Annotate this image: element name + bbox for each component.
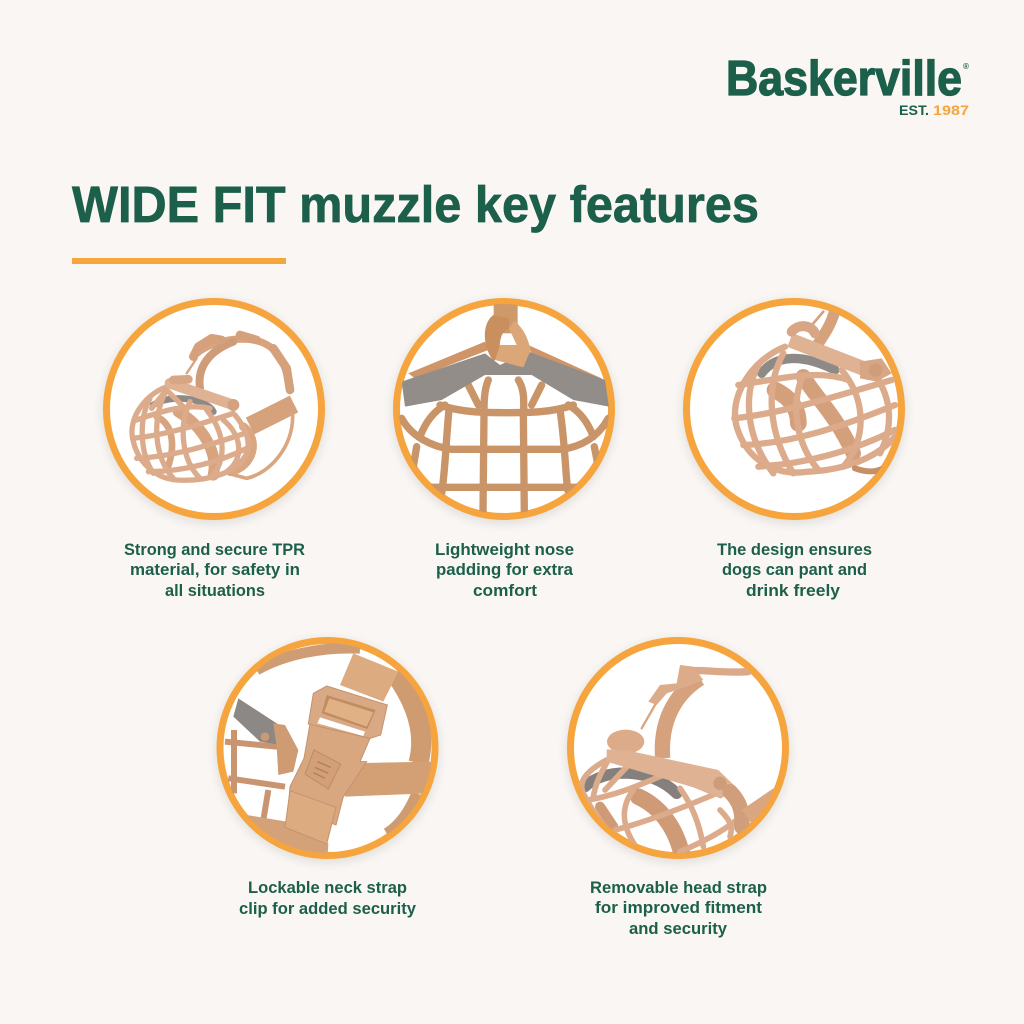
caption: Removable head strap	[590, 879, 767, 897]
caption: comfort	[473, 582, 538, 600]
logo: 1987	[933, 102, 969, 118]
caption: Lightweight nose	[435, 541, 574, 559]
caption	[435, 541, 574, 600]
logo: ®	[963, 62, 969, 71]
caption: Strong and secure TPR	[124, 541, 305, 559]
caption	[124, 541, 305, 600]
image circle: full muzzle	[102, 300, 326, 524]
caption	[239, 879, 417, 918]
logo: EST.	[899, 102, 929, 118]
image circle: cage side view	[682, 300, 906, 524]
caption: Lockable neck strap	[248, 879, 407, 897]
panel: neck strap clip	[216, 639, 440, 918]
title underline	[72, 258, 286, 264]
caption	[717, 541, 872, 600]
panel: TPR material	[102, 300, 326, 600]
image circle: head strap close-up	[566, 639, 790, 863]
image circle: nose padding close-up	[392, 300, 616, 524]
caption	[590, 879, 767, 938]
caption: drink freely	[746, 582, 841, 600]
image circle: buckle close-up	[216, 639, 440, 863]
caption: and security	[629, 920, 728, 938]
caption: all situations	[165, 582, 265, 600]
caption: dogs can pant and	[722, 561, 867, 579]
caption: material, for safety in	[130, 561, 300, 579]
caption: padding for extra	[436, 561, 574, 579]
panel: nose padding	[392, 300, 616, 600]
logo: Baskerville	[726, 52, 962, 106]
caption: The design ensures	[717, 541, 872, 559]
caption: clip for added security	[239, 900, 417, 918]
panel: head strap	[566, 639, 790, 938]
caption: for improved fitment	[595, 899, 763, 917]
title: WIDE FIT muzzle key features	[72, 176, 759, 233]
panel: pant and drink	[682, 300, 906, 600]
